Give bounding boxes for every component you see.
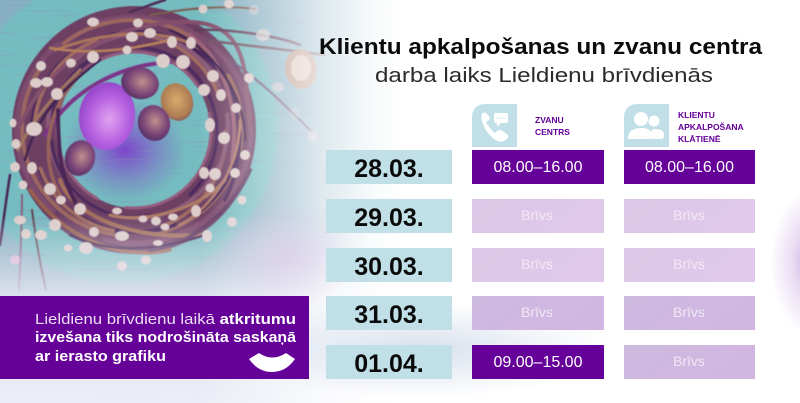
- title: [319, 34, 763, 87]
- date: [326, 199, 452, 233]
- icon: smile: [249, 353, 295, 372]
- label: Klientu apkalpošana klātienē: KLĀTIENĒ: [678, 134, 721, 144]
- column header: call centre: [472, 104, 570, 147]
- row: 01.04.: [326, 345, 755, 379]
- call centre hours: 09.00–15.00: [494, 354, 583, 371]
- wreath: [0, 0, 325, 290]
- label: Klientu apkalpošana klātienē: APKALPOŠANA: [678, 121, 744, 132]
- title: Klientu apkalpošanas un zvanu centra: [319, 34, 763, 59]
- row: 29.03.: [326, 199, 755, 233]
- call centre closed: [472, 248, 604, 282]
- pussy willow catkins: [10, 0, 318, 271]
- Easter eggs: [61, 47, 320, 179]
- label: Klientu apkalpošana klātienē: KLIENTU: [678, 110, 715, 120]
- row: 28.03.: [326, 150, 755, 184]
- notice text: ar ierasto grafiku: [35, 349, 166, 365]
- call centre closed: Brīvs: [521, 207, 553, 223]
- call centre closed: Brīvs: [521, 256, 553, 272]
- call centre closed: Brīvs: [521, 304, 553, 320]
- icon: phone with speech bubble: [472, 104, 517, 147]
- title: darba laiks Lieldienu brīvdienās: [375, 65, 713, 87]
- callout: waste collection notice: [0, 296, 309, 379]
- date: 31.03.: [354, 301, 424, 329]
- in-person closed: Brīvs: [673, 256, 705, 272]
- call centre hours: 08.00–16.00: [494, 159, 583, 176]
- in-person closed: Brīvs: [673, 304, 705, 320]
- in-person closed: [624, 248, 755, 282]
- date: [326, 248, 452, 282]
- notice text: Lieldienu brīvdienu laikā atkritumu: [35, 312, 296, 328]
- call centre hours: [472, 345, 604, 379]
- icon: two people: [624, 104, 669, 147]
- date: [326, 150, 452, 184]
- call centre closed: [472, 199, 604, 233]
- label: Zvanu centrs: ZVANU: [535, 115, 564, 125]
- date: [326, 345, 452, 379]
- in-person closed: [624, 296, 755, 330]
- date: 28.03.: [354, 155, 424, 183]
- call centre closed: [472, 296, 604, 330]
- date: 30.03.: [354, 253, 424, 281]
- in-person closed: [624, 345, 755, 379]
- label: Zvanu centrs: CENTRS: [535, 127, 570, 137]
- call centre hours: [472, 150, 604, 184]
- in-person hours: [624, 150, 755, 184]
- notice text: [35, 312, 297, 365]
- column header: in-person customer service: [624, 104, 744, 147]
- in-person closed: Brīvs: [673, 207, 705, 223]
- in-person hours: 08.00–16.00: [645, 159, 734, 176]
- notice text: izvešana tiks nodrošināta saskaņā: [35, 330, 297, 346]
- in-person closed: [624, 199, 755, 233]
- soft white fades over photo: [0, 215, 400, 403]
- row: 30.03.: [326, 248, 755, 282]
- date: 29.03.: [354, 204, 424, 232]
- row: 31.03.: [326, 296, 755, 330]
- in-person closed: Brīvs: [673, 353, 705, 369]
- date: [326, 296, 452, 330]
- date: 01.04.: [354, 350, 424, 378]
